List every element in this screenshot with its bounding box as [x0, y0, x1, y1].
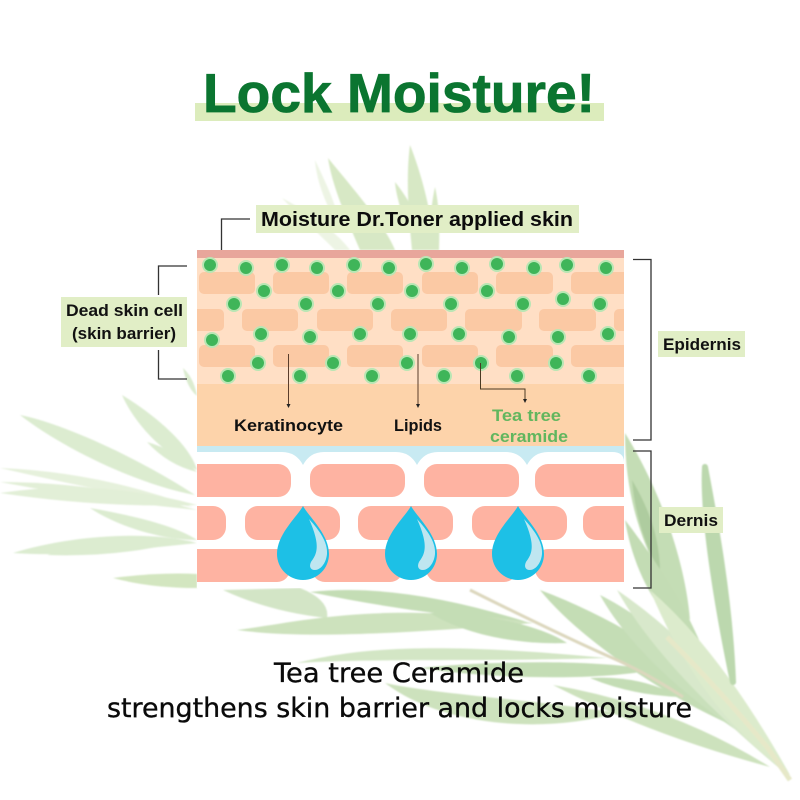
callout: dead skin cell: (skin barrier) [72, 324, 176, 343]
skin diagram [197, 250, 624, 588]
lower leaves [223, 433, 790, 777]
dermis white cells [197, 452, 624, 588]
label: tea tree ceramide [490, 406, 568, 446]
bottom caption [107, 658, 692, 724]
ceramide dots halo [202, 256, 616, 384]
title highlight [195, 103, 604, 121]
background: tea tree leaves [0, 145, 790, 780]
label: tea tree ceramide: Tea tree [492, 406, 561, 425]
keratinocyte bricks [197, 272, 624, 367]
label: keratinocyte: Keratinocyte [234, 416, 343, 435]
ceramide dots [204, 258, 614, 382]
callout: dead skin cell: Dead skin cell [66, 301, 183, 320]
callout: dermis bracket and label [633, 451, 723, 588]
bottom caption: Tea tree Ceramide [273, 658, 524, 689]
callout: epidermis bracket and label: Epidernis [663, 335, 741, 354]
title [195, 62, 604, 124]
callout: moisture dr.toner applied skin: Moisture Dr.Toner applied skin [261, 209, 573, 231]
panel: dermis [197, 446, 624, 588]
label: lipids: Lipids [394, 416, 442, 435]
dermis bricks [197, 464, 624, 582]
icon: water drop 2 [385, 506, 437, 580]
label: tea tree ceramide: ceramide [490, 427, 568, 446]
arrow: tea tree ceramide [480, 363, 527, 403]
arrow: keratinocyte [286, 354, 290, 408]
title text: Lock Moisture! [203, 62, 595, 124]
bottom caption: strengthens skin barrier and locks moisture [107, 693, 692, 724]
icon: water drop 1 [277, 506, 329, 580]
arrow: lipids [416, 354, 420, 408]
panel: epidermis [197, 250, 624, 446]
top leaves [282, 145, 439, 250]
applied toner layer [197, 250, 624, 258]
callout: moisture dr.toner applied skin [222, 205, 579, 250]
callout: epidermis bracket and label [633, 260, 745, 440]
callout: dead skin cell [61, 266, 187, 379]
icon: water drop 3 [492, 506, 544, 580]
callout: dermis bracket and label: Dernis [664, 511, 718, 530]
